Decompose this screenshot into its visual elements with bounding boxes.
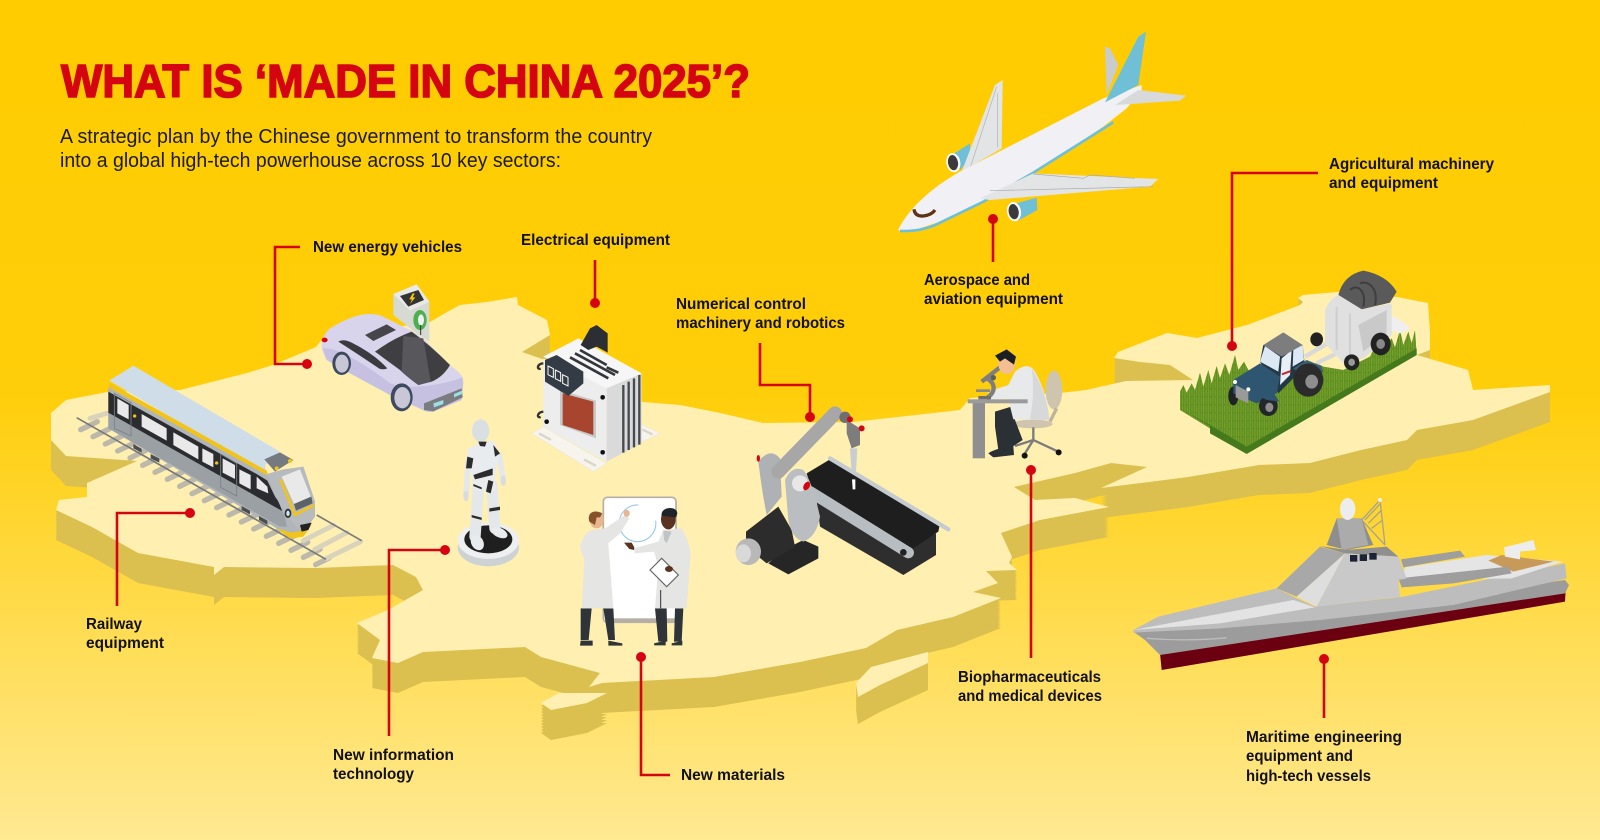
dot xyxy=(185,508,195,518)
icon: tractor and baler on grass xyxy=(1180,271,1417,454)
label: New information xyxy=(333,747,454,764)
dot xyxy=(1227,341,1237,351)
label: New materials xyxy=(681,767,785,784)
label: Railway xyxy=(86,616,142,633)
dot xyxy=(1319,654,1329,664)
dot xyxy=(988,214,998,224)
label: technology xyxy=(333,766,414,783)
icon: humanoid robot xyxy=(458,419,519,566)
icon: robotic arm and conveyor xyxy=(736,412,948,575)
title: WHAT IS ‘MADE IN CHINA 2025’? xyxy=(61,55,750,107)
label: Maritime engineering xyxy=(1246,729,1402,746)
icon: railway train xyxy=(77,366,362,565)
leader line xyxy=(1323,659,1325,718)
label: machinery and robotics xyxy=(676,315,845,332)
leader line xyxy=(389,550,445,736)
tractor xyxy=(1228,332,1323,416)
leader line xyxy=(760,343,810,417)
label: aviation equipment xyxy=(924,291,1063,308)
dot xyxy=(636,652,646,662)
label: Numerical control xyxy=(676,296,806,313)
callout: agricultural machinery and equipment xyxy=(1227,156,1494,351)
label: high-tech vessels xyxy=(1246,768,1371,785)
label: equipment xyxy=(86,635,164,652)
callout: electrical equipment xyxy=(521,232,670,308)
label: Agricultural machinery xyxy=(1329,156,1494,173)
callout: new information technology xyxy=(333,545,454,783)
dot xyxy=(1026,465,1036,475)
label: New energy vehicles xyxy=(313,239,462,256)
callout: numerical control machinery and robotics xyxy=(676,296,845,422)
subtitle xyxy=(60,126,652,172)
label: Electrical equipment xyxy=(521,232,670,249)
dot xyxy=(440,545,450,555)
icon: electric car and charger xyxy=(322,284,463,412)
leader line xyxy=(594,260,596,303)
label: Biopharmaceuticals xyxy=(958,669,1101,686)
leader line xyxy=(992,219,994,262)
callout: maritime engineering equipment and high-tech vessels xyxy=(1246,654,1402,785)
subtitle: A strategic plan by the Chinese government to transform the country xyxy=(60,126,652,148)
dot xyxy=(302,359,312,369)
icon: maritime vessel xyxy=(1133,498,1569,670)
charging station xyxy=(393,284,429,342)
dot xyxy=(805,412,815,422)
leader line xyxy=(1030,470,1032,658)
callout: new materials xyxy=(636,652,785,784)
map of China xyxy=(51,292,1550,740)
leader line xyxy=(641,657,670,775)
icon: scientist with microscope xyxy=(968,349,1062,459)
subtitle: into a global high-tech powerhouse across 10 key sectors: xyxy=(60,150,561,172)
leader line xyxy=(275,247,307,364)
icon: scientists at whiteboard xyxy=(580,497,691,646)
icon: airplane xyxy=(898,32,1186,232)
label: and equipment xyxy=(1329,175,1438,192)
label: and medical devices xyxy=(958,688,1102,705)
grass field xyxy=(1180,330,1417,454)
callout: railway equipment xyxy=(86,508,195,652)
leader line xyxy=(117,513,190,606)
callout: biopharmaceuticals and medical devices xyxy=(958,465,1102,705)
leader line xyxy=(1232,173,1318,346)
dot xyxy=(590,298,600,308)
label: Aerospace and xyxy=(924,272,1030,289)
car body xyxy=(322,314,463,412)
callout: new energy vehicles xyxy=(275,239,462,369)
label: equipment and xyxy=(1246,748,1353,765)
icon: transformer xyxy=(532,325,660,472)
baler xyxy=(1305,271,1411,370)
map extruded side wall xyxy=(51,294,1550,740)
callout: aerospace and aviation equipment xyxy=(924,214,1063,308)
map top surface xyxy=(51,292,1550,710)
